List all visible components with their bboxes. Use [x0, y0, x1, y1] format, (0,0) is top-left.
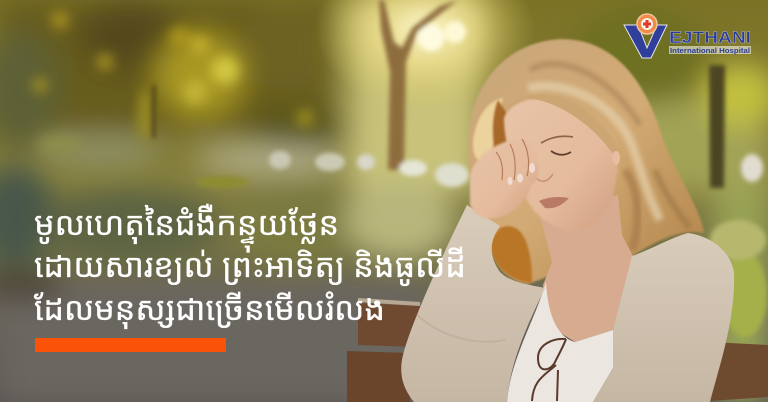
face — [504, 99, 618, 231]
nose shadow — [536, 174, 553, 181]
glasses — [532, 339, 566, 401]
white top — [507, 282, 613, 402]
cardigan: right front and shoulder — [593, 233, 734, 402]
wooden bench — [347, 298, 768, 402]
neck and chest — [540, 195, 634, 342]
headline line 1: មូលហេតុនៃជំងឺកន្ទុយថ្លែន — [34, 200, 339, 245]
amber under-hair by the wrist — [490, 226, 532, 283]
hair fringe over forehead — [504, 94, 619, 162]
woman — [401, 39, 734, 402]
cardigan: sleeve and left front — [401, 205, 545, 402]
orange accent bar — [35, 338, 226, 352]
hand at eye — [470, 138, 539, 219]
ear — [612, 151, 620, 165]
logo: Vejthani International Hospital: International Hospital — [670, 48, 750, 55]
fingernails — [508, 163, 535, 185]
hair — [468, 39, 704, 284]
brow and closed eye — [541, 136, 573, 143]
hair highlight strands — [528, 86, 660, 220]
bokeh highlights — [32, 11, 314, 155]
headline line 2: ដោយសារខ្យល់ ព្រះអាទិត្យ និងធូលីដី — [34, 242, 466, 287]
logo: Vejthani International Hospital: EJTHANI — [669, 29, 751, 47]
logo: Vejthani International Hospital — [623, 13, 751, 58]
headline line 3: ដែលមនុស្សជាច្រើនមើលរំលង — [34, 285, 385, 330]
headline text — [34, 200, 466, 330]
lips — [539, 197, 569, 208]
